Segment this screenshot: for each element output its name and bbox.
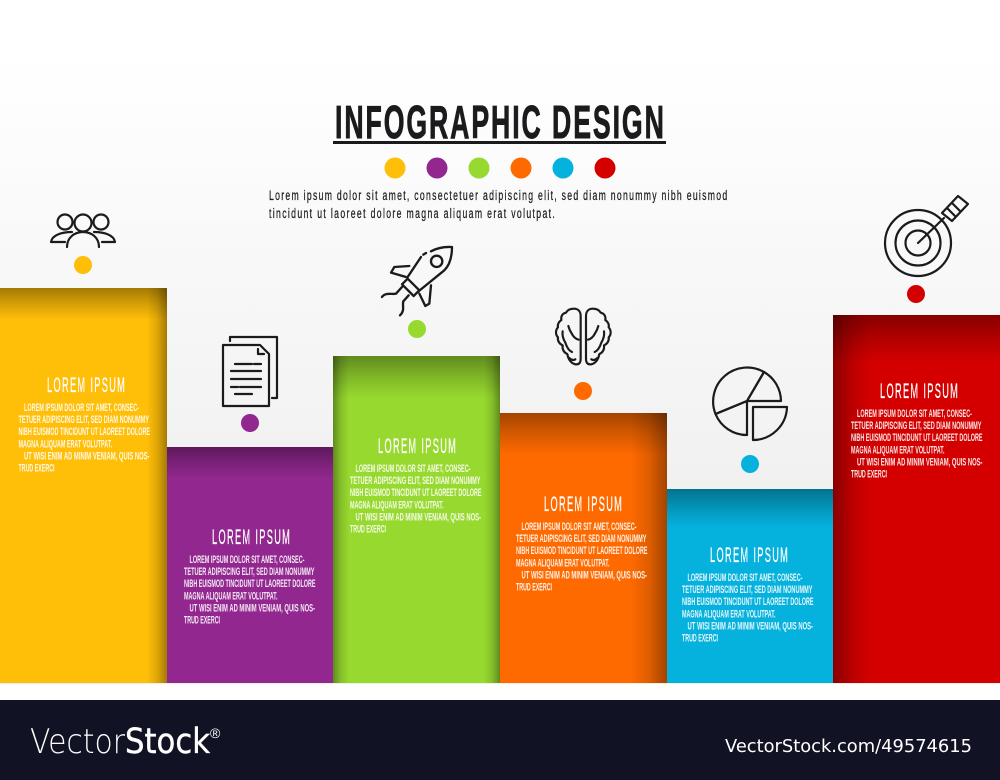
panel: purple column: UT WISI ENIM AD MINIM VENIAM, QUIS NOS- xyxy=(190,602,315,614)
intro text: Lorem ipsum dolor sit amet, consectetuer adipiscing elit, sed diam nonummy nibh euismod xyxy=(269,188,727,204)
panel: blue column: MAGNA ALIQUAM ERAT VOLUTPAT. xyxy=(682,608,776,620)
panel: yellow column: MAGNA ALIQUAM ERAT VOLUTPAT. xyxy=(18,438,112,450)
panel: blue column: UT WISI ENIM AD MINIM VENIAM, QUIS NOS- xyxy=(688,620,813,632)
icon: rocket xyxy=(382,247,452,315)
icon: brain xyxy=(556,309,611,364)
marker dot: orange xyxy=(574,382,592,400)
panel: blue column: LOREM IPSUM DOLOR SIT AMET, CONSEC- xyxy=(688,572,803,584)
marker dot: yellow xyxy=(74,256,92,274)
panel: green column: TETUER ADIPISCING ELIT, SED DIAM NONUMMY xyxy=(350,475,481,487)
icon: people xyxy=(51,214,115,247)
panel: orange column: NIBH EUISMOD TINCIDUNT UT LAOREET DOLORE xyxy=(516,545,648,557)
colour dots row xyxy=(384,158,616,178)
panel: red column: TRUD EXERCI xyxy=(851,468,887,480)
intro text: tincidunt ut laoreet dolore magna aliquam erat volutpat. xyxy=(269,206,555,222)
panel: green column: TRUD EXERCI xyxy=(350,524,386,536)
panel: purple column: MAGNA ALIQUAM ERAT VOLUTPAT. xyxy=(184,590,278,602)
marker dot: blue xyxy=(741,455,759,473)
footer logo: Vector xyxy=(30,722,125,762)
panel: red column: LOREM IPSUM xyxy=(880,380,958,403)
panel: blue column xyxy=(667,489,833,683)
panel: green column: LOREM IPSUM DOLOR SIT AMET, CONSEC- xyxy=(356,463,471,475)
panel: orange column: TETUER ADIPISCING ELIT, SED DIAM NONUMMY xyxy=(516,533,647,545)
icon: target with arrow xyxy=(885,196,968,276)
panel: yellow column: TETUER ADIPISCING ELIT, SED DIAM NONUMMY xyxy=(18,414,149,426)
marker dot: purple xyxy=(241,414,259,432)
panel: blue column: TRUD EXERCI xyxy=(682,632,718,644)
marker dot: green xyxy=(408,320,426,338)
panel: orange column: TRUD EXERCI xyxy=(516,582,552,594)
panel: orange column: MAGNA ALIQUAM ERAT VOLUTPAT. xyxy=(516,558,610,570)
panel: yellow column xyxy=(0,288,167,683)
panel: blue column: LOREM IPSUM xyxy=(710,544,788,567)
footer logo: Stock xyxy=(125,722,211,762)
panel: blue column: NIBH EUISMOD TINCIDUNT UT LAOREET DOLORE xyxy=(682,596,814,608)
panel: purple column: NIBH EUISMOD TINCIDUNT UT LAOREET DOLORE xyxy=(184,578,316,590)
footer logo: ® xyxy=(210,725,221,741)
panel: green column: MAGNA ALIQUAM ERAT VOLUTPAT. xyxy=(350,500,444,512)
panel: orange column: LOREM IPSUM xyxy=(544,493,622,516)
panel: green column: UT WISI ENIM AD MINIM VENIAM, QUIS NOS- xyxy=(356,512,481,524)
panel: yellow column: LOREM IPSUM xyxy=(47,374,125,397)
icon: documents xyxy=(223,337,277,406)
panel: green column: NIBH EUISMOD TINCIDUNT UT LAOREET DOLORE xyxy=(350,487,482,499)
panel: yellow column: TRUD EXERCI xyxy=(18,462,54,474)
footer logo xyxy=(30,722,221,762)
panel: orange column xyxy=(500,413,667,683)
panel: purple column xyxy=(167,447,333,683)
panel: orange column: LOREM IPSUM DOLOR SIT AMET, CONSEC- xyxy=(522,521,637,533)
panel: purple column: LOREM IPSUM DOLOR SIT AMET, CONSEC- xyxy=(190,554,305,566)
footer image id: VectorStock.com/49574615 xyxy=(725,736,972,757)
panel: red column xyxy=(833,315,1000,683)
panel: green column xyxy=(333,356,500,683)
panel: yellow column: LOREM IPSUM DOLOR SIT AMET, CONSEC- xyxy=(24,402,139,414)
panel: blue column: TETUER ADIPISCING ELIT, SED DIAM NONUMMY xyxy=(682,584,813,596)
panel: green column: LOREM IPSUM xyxy=(378,435,456,458)
title: INFOGRAPHIC DESIGN xyxy=(335,96,664,148)
panel: purple column: TRUD EXERCI xyxy=(184,614,220,626)
panel: yellow column: UT WISI ENIM AD MINIM VENIAM, QUIS NOS- xyxy=(24,450,150,462)
panel: yellow column: NIBH EUISMOD TINCIDUNT UT LAOREET DOLORE xyxy=(18,426,150,438)
panel: purple column: LOREM IPSUM xyxy=(212,526,290,549)
panel: purple column: TETUER ADIPISCING ELIT, SED DIAM NONUMMY xyxy=(184,566,315,578)
icon: pie chart xyxy=(713,368,787,440)
footer bar xyxy=(0,700,1000,780)
intro text xyxy=(269,188,727,222)
panel: orange column: UT WISI ENIM AD MINIM VENIAM, QUIS NOS- xyxy=(522,570,647,582)
marker dot: red xyxy=(907,285,925,303)
